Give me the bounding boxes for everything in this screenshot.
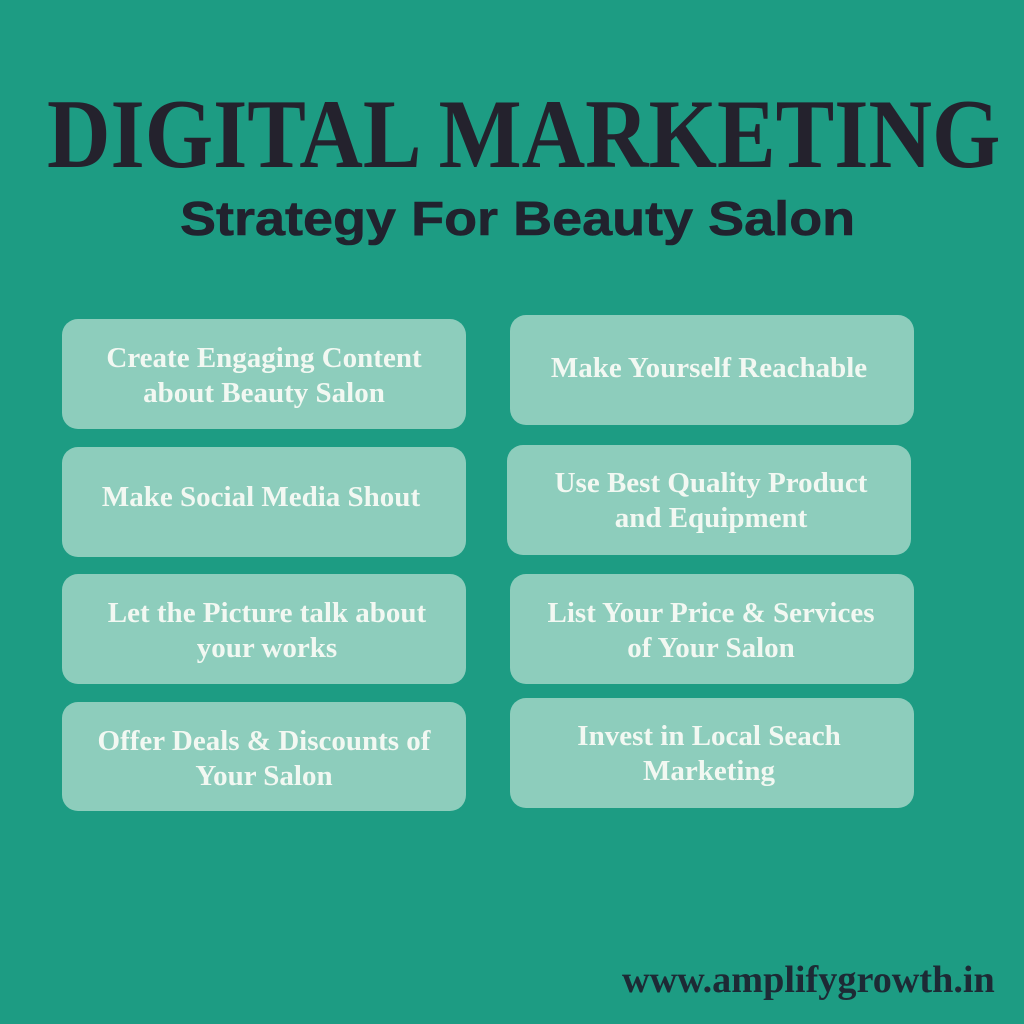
card: make yourself reachable	[510, 315, 914, 425]
card: create engaging content	[62, 319, 466, 429]
card: best quality product	[507, 445, 911, 555]
card: local search marketing: Invest in Local Seach	[577, 720, 841, 752]
card: offer deals: Offer Deals & Discounts of	[98, 725, 430, 757]
website url: www.amplifygrowth.in	[622, 959, 995, 1001]
card: make yourself reachable: Make Yourself Reachable	[551, 352, 867, 384]
card: local search marketing: Marketing	[643, 755, 775, 787]
card: let the picture talk: Let the Picture talk about	[108, 597, 426, 629]
card: offer deals: Your Salon	[195, 760, 333, 792]
card: let the picture talk	[62, 574, 466, 684]
card: create engaging content: about Beauty Salon	[143, 377, 385, 409]
card: best quality product: Use Best Quality Product	[555, 467, 867, 499]
card: list your price: of Your Salon	[627, 632, 795, 664]
card: best quality product: and Equipment	[615, 502, 807, 534]
subtitle: Strategy For Beauty Salon	[180, 193, 855, 246]
card: local search marketing	[510, 698, 914, 808]
card: offer deals	[62, 702, 466, 811]
card: make social media shout	[62, 447, 466, 557]
card: list your price: List Your Price & Services	[548, 597, 874, 629]
card: create engaging content: Create Engaging Content	[106, 342, 422, 374]
card: list your price	[510, 574, 914, 684]
title: DIGITAL MARKETING	[47, 80, 1000, 189]
card: let the picture talk: your works	[197, 632, 337, 664]
card: make social media shout: Make Social Media Shout	[102, 481, 420, 513]
